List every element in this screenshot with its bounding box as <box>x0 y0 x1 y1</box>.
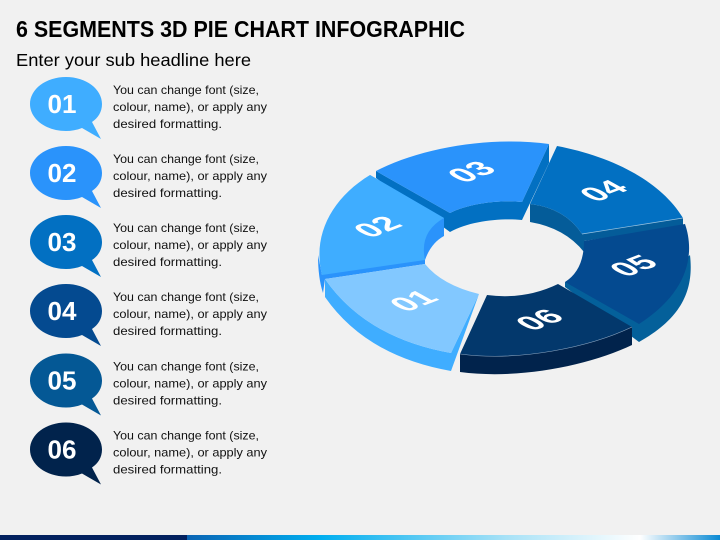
bubble 02: 02 <box>48 158 76 188</box>
text 01: desired formatting. <box>113 117 222 131</box>
segment 01 <box>325 264 479 371</box>
bubble 03 <box>30 215 102 277</box>
3D pie chart <box>318 142 691 374</box>
text 03: desired formatting. <box>113 255 222 269</box>
list item 01 <box>30 77 267 139</box>
segment 04 <box>530 146 683 252</box>
bubble 01: 01 <box>48 89 76 119</box>
text 05: desired formatting. <box>113 394 222 408</box>
list item 02 <box>30 146 267 208</box>
segment 03 <box>376 142 549 232</box>
bubble 05 <box>30 354 102 416</box>
text 04: You can change font (size, <box>113 290 259 304</box>
text 02: You can change font (size, <box>113 152 259 166</box>
text 01 <box>113 83 267 131</box>
list item 06 <box>30 422 267 484</box>
bubble 02 <box>30 146 102 208</box>
text 05: colour, name), or apply any <box>113 376 267 390</box>
text 03 <box>113 221 267 269</box>
segment 02 <box>318 175 444 293</box>
segment 05 <box>565 224 691 342</box>
text 02: desired formatting. <box>113 186 222 200</box>
text 06: You can change font (size, <box>113 428 259 442</box>
text 06: desired formatting. <box>113 462 222 476</box>
bubble 06: 06 <box>48 434 76 464</box>
text 01: You can change font (size, <box>113 83 259 97</box>
text 02 <box>113 152 267 200</box>
list item 03 <box>30 215 267 277</box>
bubble 06 <box>30 422 102 484</box>
segment 04: 04 <box>571 176 636 206</box>
bubble 01 <box>30 77 102 139</box>
list item 05 <box>30 354 267 416</box>
text 03: colour, name), or apply any <box>113 238 267 252</box>
sub headline: Enter your sub headline here <box>16 50 251 70</box>
segment 06: 06 <box>507 305 572 335</box>
text 05 <box>113 360 267 408</box>
segment 02: 02 <box>345 212 410 242</box>
text 04: desired formatting. <box>113 324 222 338</box>
segment 05: 05 <box>601 251 666 281</box>
segment 06 <box>460 284 632 374</box>
text 06 <box>113 428 267 476</box>
title: 6 SEGMENTS 3D PIE CHART INFOGRAPHIC <box>16 16 465 42</box>
footer bar <box>0 535 720 540</box>
text 06: colour, name), or apply any <box>113 446 267 460</box>
text 05: You can change font (size, <box>113 360 259 374</box>
text 04: colour, name), or apply any <box>113 307 267 321</box>
bubble 04: 04 <box>48 296 77 326</box>
bubble 03: 03 <box>48 227 76 257</box>
segment 01: 01 <box>381 286 446 316</box>
segment 03: 03 <box>439 157 504 187</box>
bubble 04 <box>30 284 102 346</box>
text 04 <box>113 290 267 338</box>
text 03: You can change font (size, <box>113 221 259 235</box>
text 01: colour, name), or apply any <box>113 100 267 114</box>
list item 04 <box>30 284 267 346</box>
text 02: colour, name), or apply any <box>113 169 267 183</box>
bubble 05: 05 <box>48 366 76 396</box>
